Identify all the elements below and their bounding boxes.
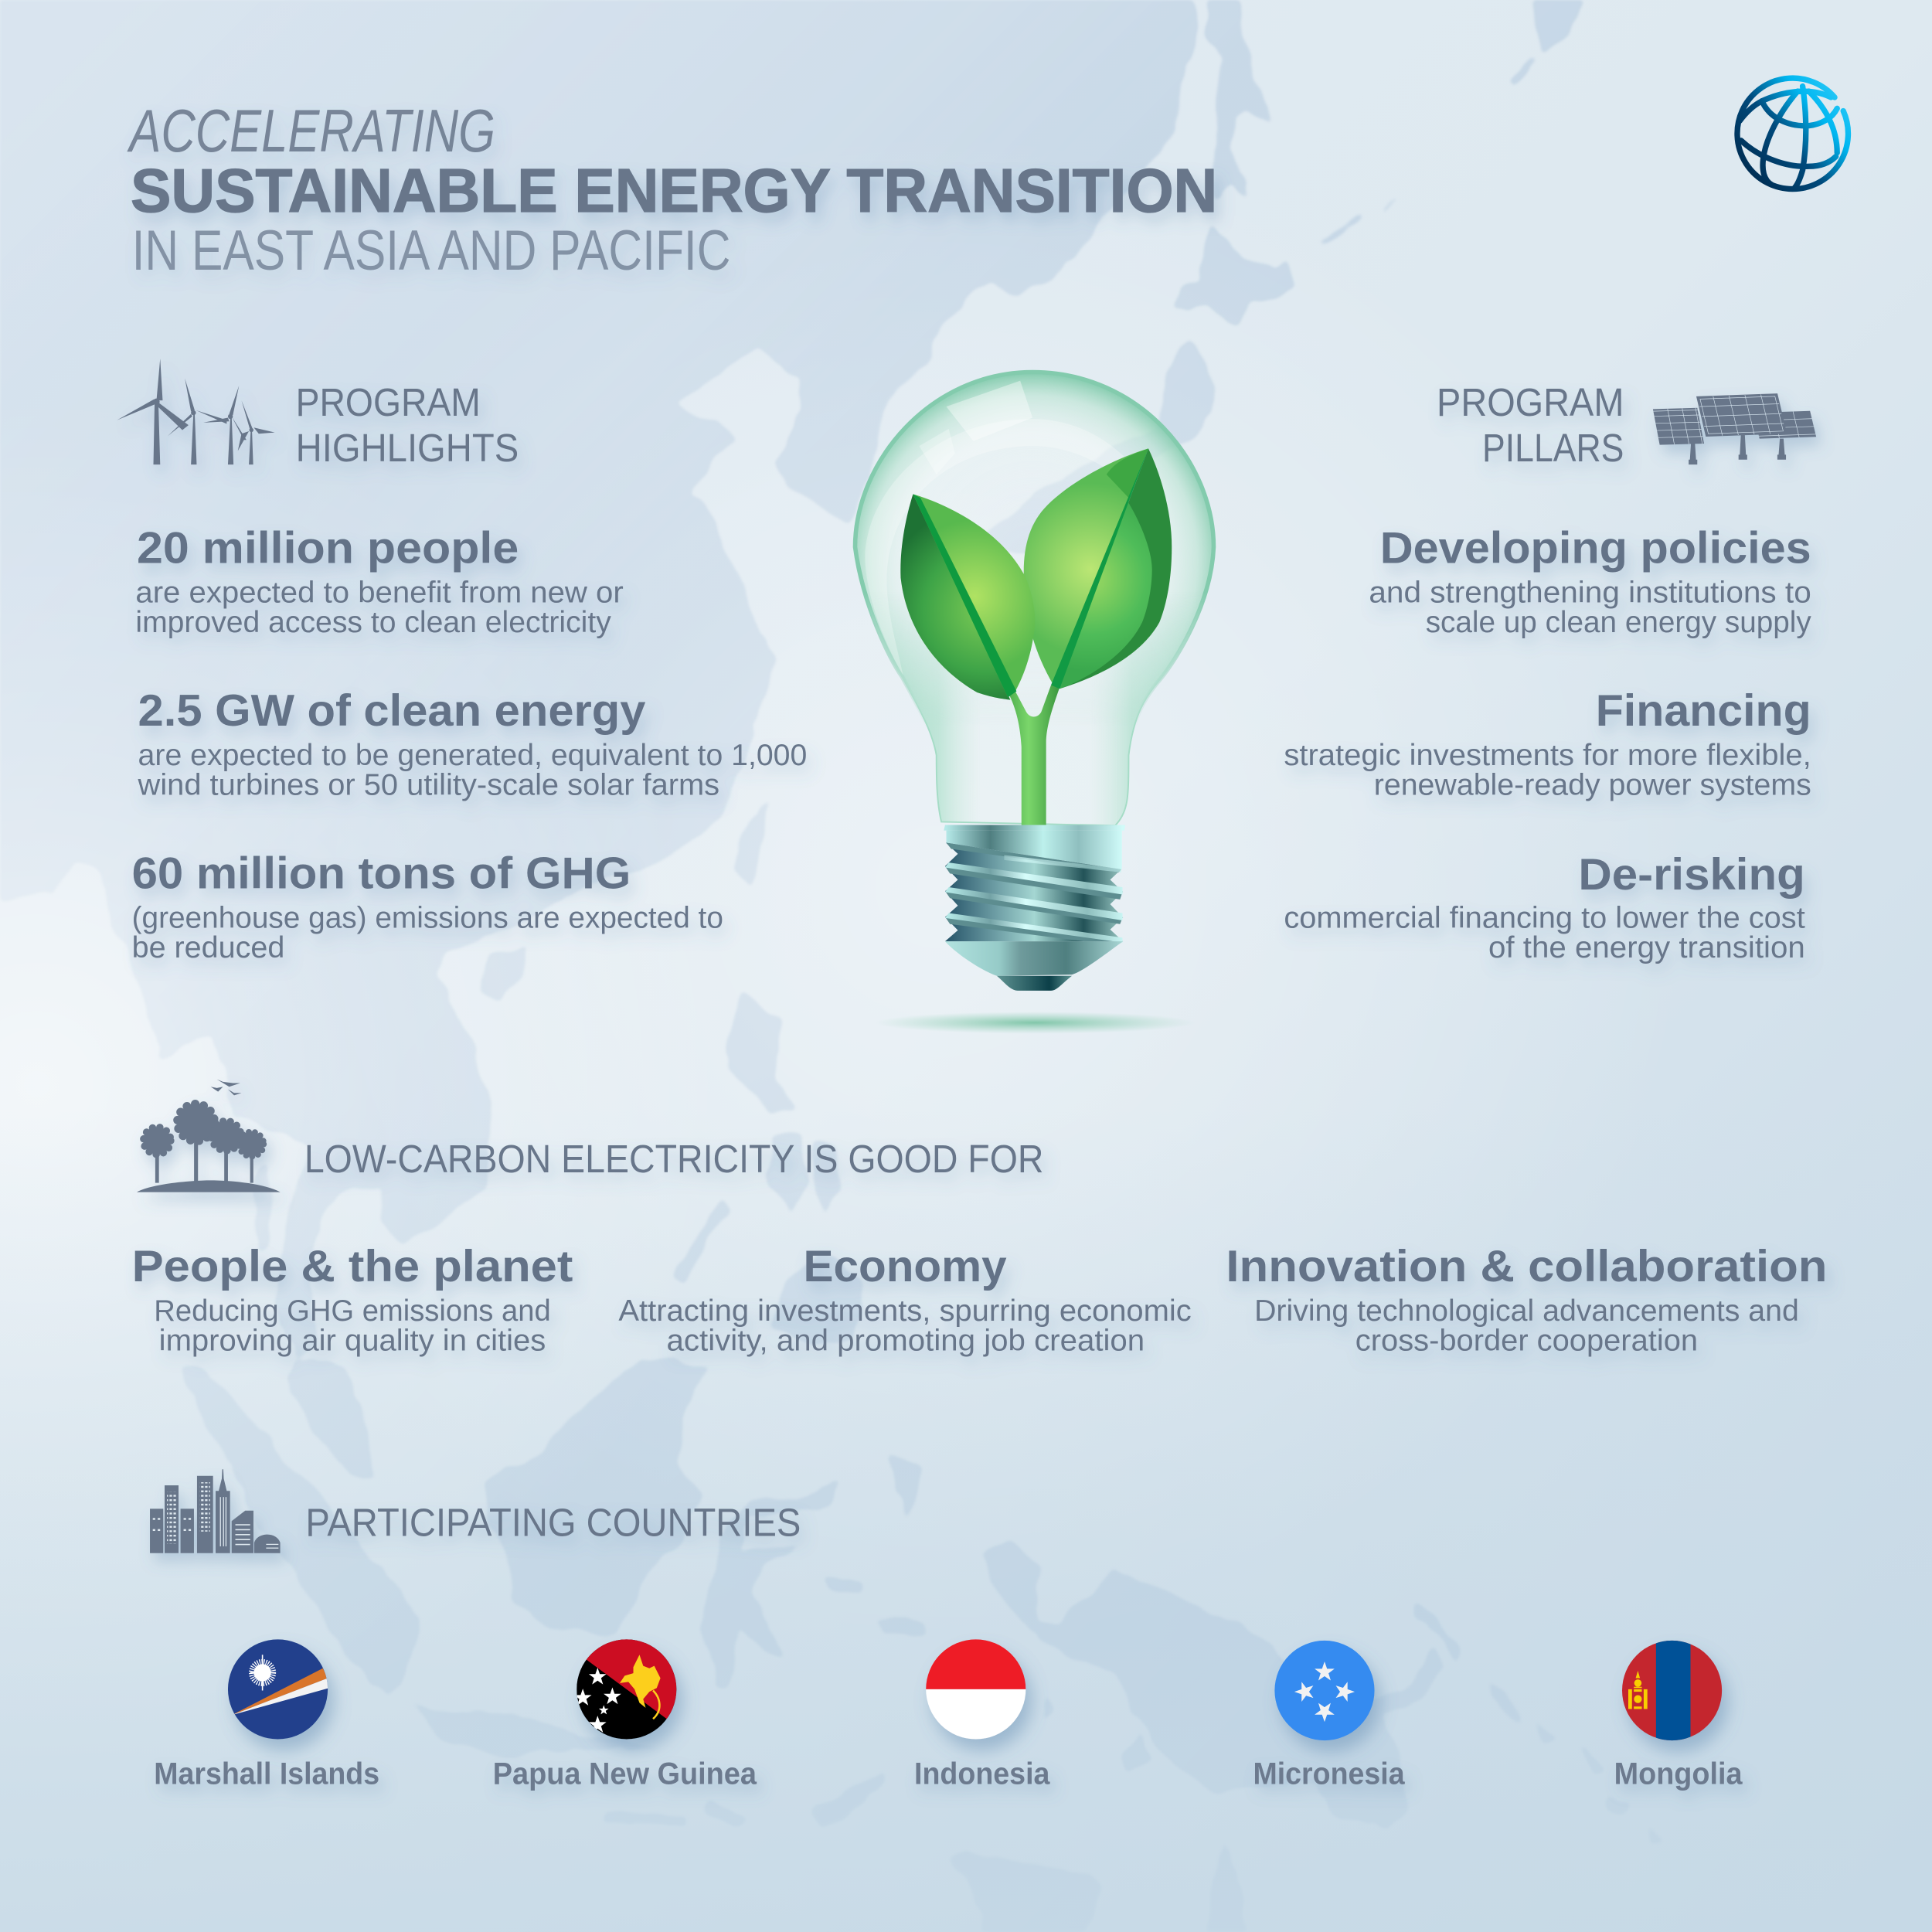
left leaf	[900, 494, 1035, 700]
highlight: 20 million people: 20 million people	[137, 524, 519, 573]
benefit: innovation and collaboration: Driving technological advancements and	[1254, 1294, 1799, 1328]
pillar: financing	[1284, 686, 1811, 801]
pillar: developing policies: scale up clean energy supply	[1426, 606, 1811, 639]
highlight: 60 million tons of GHG: be reduced	[132, 931, 284, 964]
heading: low-carbon electricity is good for: LOW-CARBON ELECTRICITY IS GOOD FOR	[304, 1137, 1043, 1181]
benefit: economy: activity, and promoting job creation	[667, 1324, 1145, 1357]
label: Indonesia	[914, 1757, 1050, 1791]
heading: program pillars: PILLARS	[1482, 426, 1624, 470]
highlight: 20 million people: improved access to clean electricity	[135, 606, 611, 639]
highlight: 2.5 GW of clean energy: 2.5 GW of clean energy	[138, 686, 646, 736]
flag: Indonesia	[925, 1639, 1026, 1740]
benefit: innovation and collaboration	[1226, 1242, 1827, 1357]
glass highlights	[865, 381, 1171, 675]
central illustration: light bulb with leaves	[855, 372, 1213, 1034]
benefit: people and the planet	[132, 1242, 573, 1357]
section: participating countries	[150, 1469, 1743, 1791]
highlight: 20 million people: are expected to benefit from new or	[135, 577, 624, 610]
section: program highlights	[117, 359, 807, 964]
panel right	[1753, 411, 1816, 439]
benefit: economy: Attracting investments, spurring economic	[618, 1294, 1192, 1328]
pillar: financing: strategic investments for more flexible,	[1284, 739, 1811, 772]
title line: accelerating: ACCELERATING	[127, 97, 495, 165]
icon: city skyline	[150, 1469, 281, 1553]
highlight: 60 million tons of GHG: (greenhouse gas) emissions are expected to	[132, 902, 723, 935]
pillar: de-risking: commercial financing to lower the cost	[1284, 902, 1805, 935]
heading: participating countries: PARTICIPATING COUNTRIES	[305, 1500, 801, 1544]
section: program pillars	[1284, 380, 1816, 964]
highlight: 2.5 GW of clean energy: wind turbines or 50 utility-scale solar farms	[138, 768, 719, 801]
label: Marshall Islands	[154, 1757, 379, 1791]
stem	[1008, 685, 1060, 825]
flag: Mongolia	[1621, 1640, 1723, 1741]
pillar: de-risking: De-risking	[1578, 850, 1805, 900]
highlight: 2.5 GW of clean energy	[138, 686, 807, 801]
heading: program highlights: PROGRAM	[296, 380, 481, 424]
section: low-carbon electricity	[132, 1080, 1827, 1357]
lamp socket	[944, 825, 1125, 991]
pillar: de-risking	[1284, 850, 1805, 964]
country: Papua New Guinea	[493, 1633, 757, 1791]
right leaf	[1024, 448, 1172, 689]
pillar: developing policies	[1369, 524, 1811, 639]
map of East Asia and Pacific	[0, 0, 1583, 1808]
label: Micronesia	[1253, 1757, 1405, 1791]
label: Papua New Guinea	[493, 1757, 757, 1791]
country: Indonesia	[914, 1639, 1050, 1791]
highlight: 2.5 GW of clean energy: are expected to be generated, equivalent to 1,000	[138, 739, 807, 772]
pillar: developing policies: and strengthening institutions to	[1369, 577, 1811, 610]
icon: solar panels	[1653, 394, 1816, 464]
pillar: de-risking: of the energy transition	[1488, 931, 1805, 964]
pillar: financing: renewable-ready power systems	[1374, 768, 1811, 801]
label: Mongolia	[1614, 1757, 1743, 1791]
heading: program highlights: HIGHLIGHTS	[296, 426, 519, 470]
flag: Marshall Islands	[228, 1639, 329, 1740]
benefit: innovation and collaboration: cross-border cooperation	[1355, 1324, 1698, 1357]
benefit: people and the planet: improving air quality in cities	[159, 1324, 546, 1357]
pillar: financing: Financing	[1596, 686, 1811, 736]
title line: in east asia and pacific: IN EAST ASIA AND PACIFIC	[132, 219, 730, 282]
country: Mongolia	[1614, 1640, 1743, 1791]
country: Marshall Islands	[154, 1639, 379, 1791]
benefit: people and the planet: Reducing GHG emissions and	[154, 1294, 551, 1328]
highlight: 60 million tons of GHG: 60 million tons of GHG	[132, 849, 631, 899]
flag: Papua New Guinea	[574, 1633, 680, 1740]
heading: program pillars	[1437, 380, 1624, 470]
highlight: 20 million people	[135, 524, 624, 639]
pillar: developing policies: Developing policies	[1380, 524, 1811, 573]
highlight: 60 million tons of GHG	[132, 849, 723, 964]
benefit: people and the planet: People & the planet	[132, 1242, 573, 1291]
benefit: economy	[618, 1242, 1192, 1357]
bulb glass lower neck	[873, 609, 1193, 825]
benefit: economy: Economy	[804, 1242, 1007, 1291]
heading: program pillars: PROGRAM	[1437, 380, 1624, 424]
icon: trees and birds	[137, 1080, 281, 1192]
panel left	[1653, 408, 1704, 445]
icon: World Bank globe logo	[1737, 78, 1848, 189]
panel centre	[1697, 394, 1786, 436]
icon: wind turbines	[117, 359, 275, 464]
country: Micronesia	[1253, 1640, 1405, 1791]
title	[127, 97, 1217, 282]
bulb shadow	[875, 1012, 1196, 1034]
heading: program highlights	[296, 380, 519, 470]
bulb glass upper dome	[853, 369, 1216, 717]
benefit: innovation and collaboration: Innovation & collaboration	[1226, 1242, 1827, 1291]
flag: Micronesia	[1274, 1640, 1375, 1741]
title line: sustainable energy transition: SUSTAINABLE ENERGY TRANSITION	[131, 156, 1217, 225]
